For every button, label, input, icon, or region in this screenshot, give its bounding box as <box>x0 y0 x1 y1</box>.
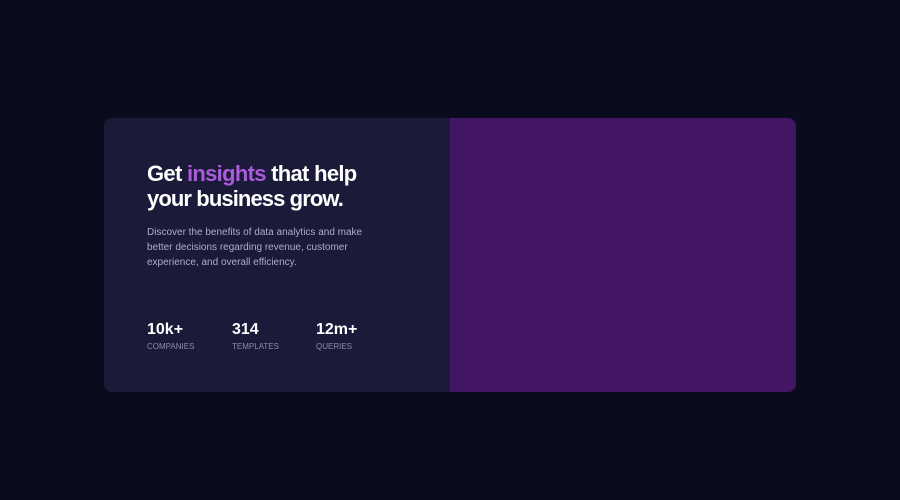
description text: better decisions regarding revenue, customer <box>147 242 348 253</box>
stat: templates <box>232 321 279 351</box>
stat: templates: 314 <box>232 321 259 338</box>
stat: queries: 12m+ <box>316 321 357 338</box>
heading <box>147 161 357 211</box>
description text <box>147 227 362 268</box>
stat: queries: QUERIES <box>316 342 352 351</box>
stat: queries <box>316 321 357 351</box>
heading: Get insights that help <box>147 161 357 186</box>
card <box>104 118 796 392</box>
stat: templates: TEMPLATES <box>232 342 279 351</box>
description text: Discover the benefits of data analytics and make <box>147 227 362 238</box>
heading: your business grow. <box>147 186 343 211</box>
stat: companies: 10k+ <box>147 321 183 338</box>
stat: companies <box>147 321 194 351</box>
description text: experience, and overall efficiency. <box>147 257 297 268</box>
stat: companies: COMPANIES <box>147 342 194 351</box>
panel: image placeholder <box>450 118 796 392</box>
